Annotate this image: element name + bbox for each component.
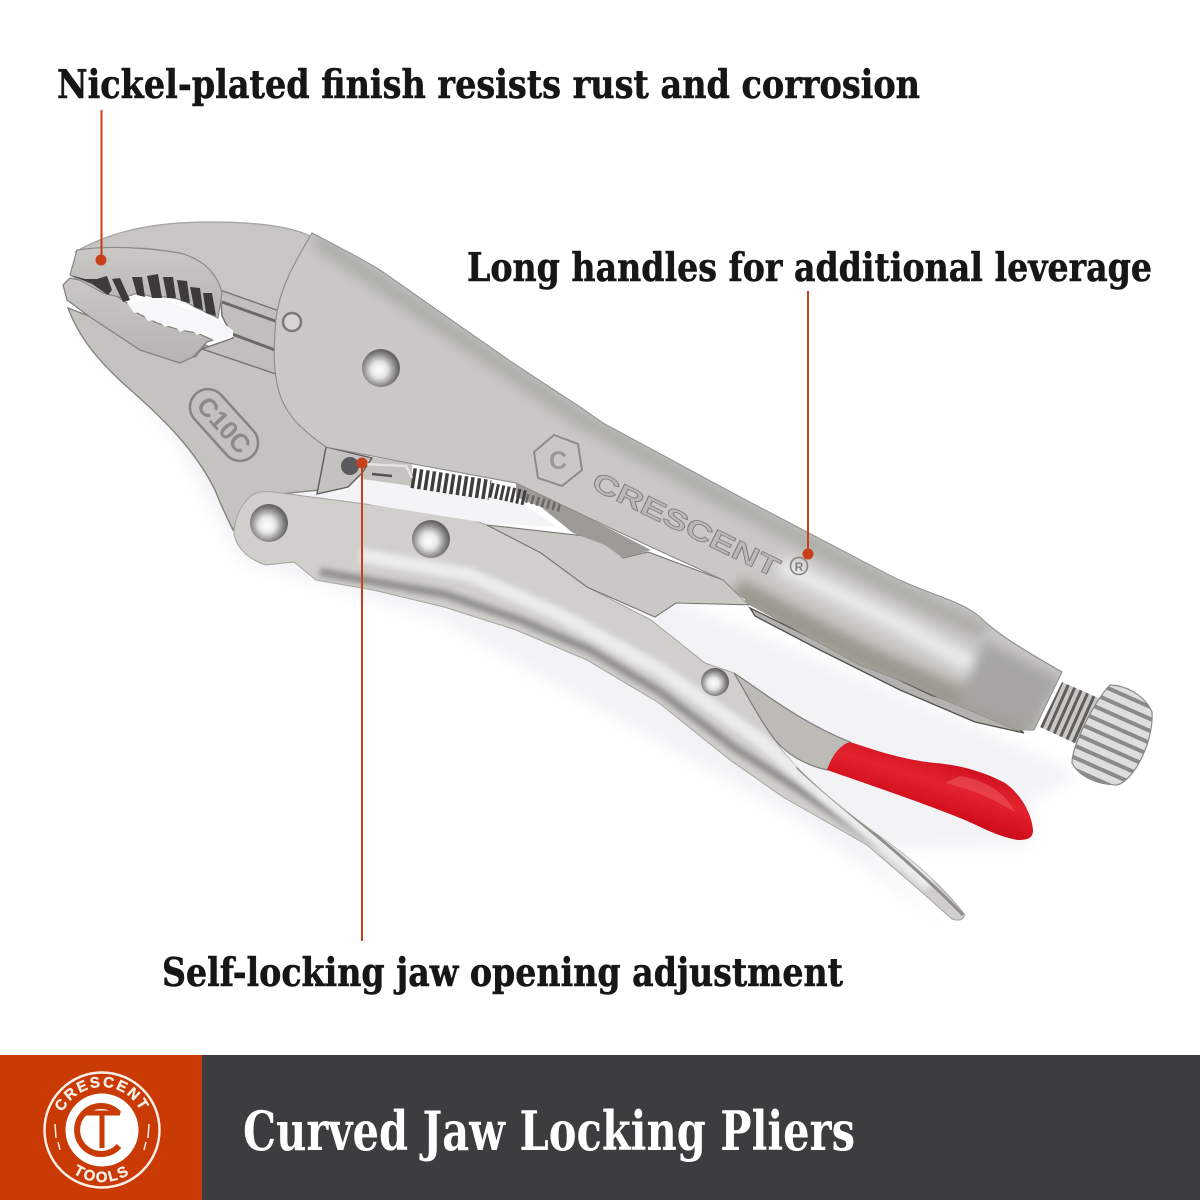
part: upper handle (274, 233, 1062, 730)
part: white gap between jaws (127, 298, 233, 340)
callout: self-locking jaw (162, 458, 844, 996)
callout: rust and corrosion (57, 62, 920, 266)
icon: Crescent Tools roundel: CRESCENT (55, 1076, 150, 1110)
part: second lever arm (734, 673, 850, 770)
part: coil spring (362, 464, 562, 508)
callout: rust and corrosion: Nickel-plated finish resists rust and corrosion (57, 62, 920, 108)
part: rail under upper handle (750, 608, 1024, 733)
part: lower jaw insert with teeth (63, 278, 213, 363)
footer title: Curved Jaw Locking Pliers (243, 1099, 855, 1163)
brand hexagon logo: C (549, 447, 567, 475)
brand hexagon logo (534, 435, 582, 486)
icon: rivet upper (362, 349, 400, 387)
callout: self-locking jaw: Self-locking jaw opening adjustment (162, 950, 844, 996)
part: grip highlight (945, 776, 1015, 812)
icon: Crescent Tools roundel (43, 1071, 161, 1189)
part: upper jaw insert (70, 247, 222, 318)
part: lower handle shading (320, 555, 963, 915)
part: upper jaw body (75, 222, 310, 316)
part: white slot behind spring (326, 478, 558, 527)
icon: rivet pivot (250, 504, 288, 542)
part: wire plate above slot (362, 456, 412, 486)
part: jaw slide bars (202, 290, 282, 374)
part: red grip (827, 742, 1033, 840)
pliers product illustration (63, 222, 1152, 925)
footer bar (0, 1055, 1200, 1200)
model badge (183, 382, 265, 468)
part: toggle link (487, 525, 757, 617)
callout: long handles (467, 245, 1152, 560)
part: upper handle shading (315, 238, 1062, 732)
icon: small pin (283, 313, 301, 331)
callout: long handles: Long handles for additional leverage (467, 245, 1152, 291)
part: lower handle (234, 491, 965, 920)
soft shadow (80, 330, 1080, 925)
part: knurled adjustment knob (1072, 685, 1152, 785)
brand name: CRESCENT (587, 466, 785, 584)
icon: rivet lower (701, 668, 729, 696)
icon: Crescent Tools roundel: TOOLS (76, 1164, 128, 1182)
part: jaw teeth (70, 274, 216, 316)
model badge: C10C (191, 390, 257, 460)
part: threaded screw (1040, 682, 1103, 747)
footer: orange logo block (0, 1055, 202, 1200)
footer: dark title band (202, 1055, 1200, 1200)
part: spring bracket (317, 447, 372, 494)
registered mark (790, 558, 808, 574)
registered mark: R (795, 560, 804, 574)
icon: rivet link (412, 520, 450, 558)
part: lower jaw body (68, 308, 345, 530)
part: strip below spring (516, 483, 651, 558)
